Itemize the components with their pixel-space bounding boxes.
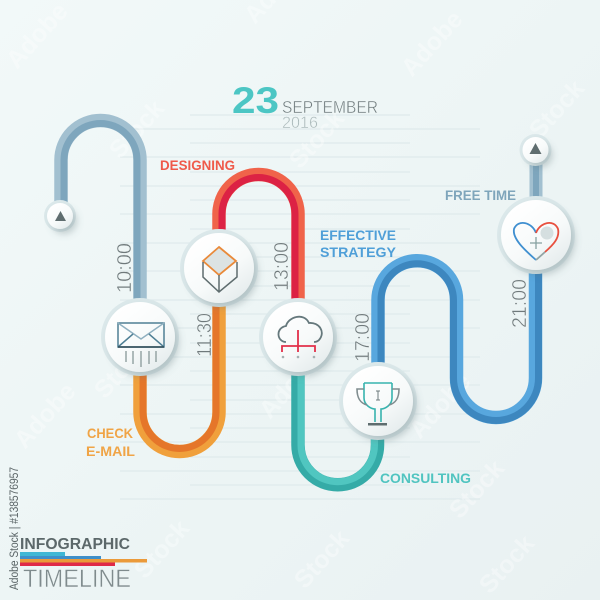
text: Stock — [444, 455, 510, 524]
label: designing: DESIGNING — [160, 157, 235, 173]
text: Adobe — [396, 5, 469, 82]
date heading: 23 — [232, 80, 279, 121]
node: email icon — [101, 298, 179, 376]
path segment: grey-blue start — [61, 120, 140, 315]
label: effective strategy: STRATEGY — [320, 244, 397, 260]
bottom-left title — [20, 536, 147, 593]
path segment: grey-blue end — [530, 160, 542, 210]
label: effective strategy: EFFECTIVE — [320, 227, 396, 243]
text: Stock — [129, 515, 195, 584]
node: trophy icon — [339, 362, 417, 440]
text: Stock — [524, 75, 590, 144]
node: cloud icon — [259, 298, 337, 376]
time: 21:00: 21:00 — [509, 279, 531, 328]
time: 17:00: 17:00 — [352, 313, 374, 362]
label: consulting: CONSULTING — [380, 470, 471, 486]
date heading: 2016 — [282, 113, 318, 132]
label: check e-mail: CHECK — [87, 425, 133, 441]
bottom-left title: INFOGRAPHIC — [20, 536, 130, 553]
text: Stock — [104, 95, 170, 164]
text: Adobe — [254, 347, 327, 424]
node: cube icon — [180, 229, 258, 307]
date heading — [232, 80, 378, 132]
time: 10:00: 10:00 — [114, 243, 136, 293]
text: Adobe — [9, 377, 82, 454]
path segment: blue — [378, 260, 538, 420]
label: effective strategy — [320, 227, 397, 260]
end marker — [520, 134, 552, 166]
text: Adobe — [404, 367, 477, 444]
time: 13:00: 13:00 — [271, 242, 293, 291]
start marker — [44, 200, 76, 232]
label: free time: FREE TIME — [445, 187, 516, 203]
node: heart icon — [497, 196, 575, 274]
path segment: teal — [298, 360, 378, 485]
time: 11:30: 11:30 — [194, 313, 216, 357]
text: Stock — [289, 525, 355, 594]
bottom-left title: TIMELINE — [23, 565, 131, 593]
path segment: orange — [140, 295, 219, 452]
label: check e-mail — [86, 425, 135, 459]
path segment: red — [219, 175, 298, 315]
label: check e-mail: E-MAIL — [86, 443, 135, 459]
date heading: SEPTEMBER — [282, 97, 378, 117]
text: Stock — [474, 530, 540, 599]
text: Stock — [284, 105, 350, 174]
text: Stock — [89, 335, 155, 404]
stock id: Adobe Stock | #138576957 — [9, 467, 21, 590]
